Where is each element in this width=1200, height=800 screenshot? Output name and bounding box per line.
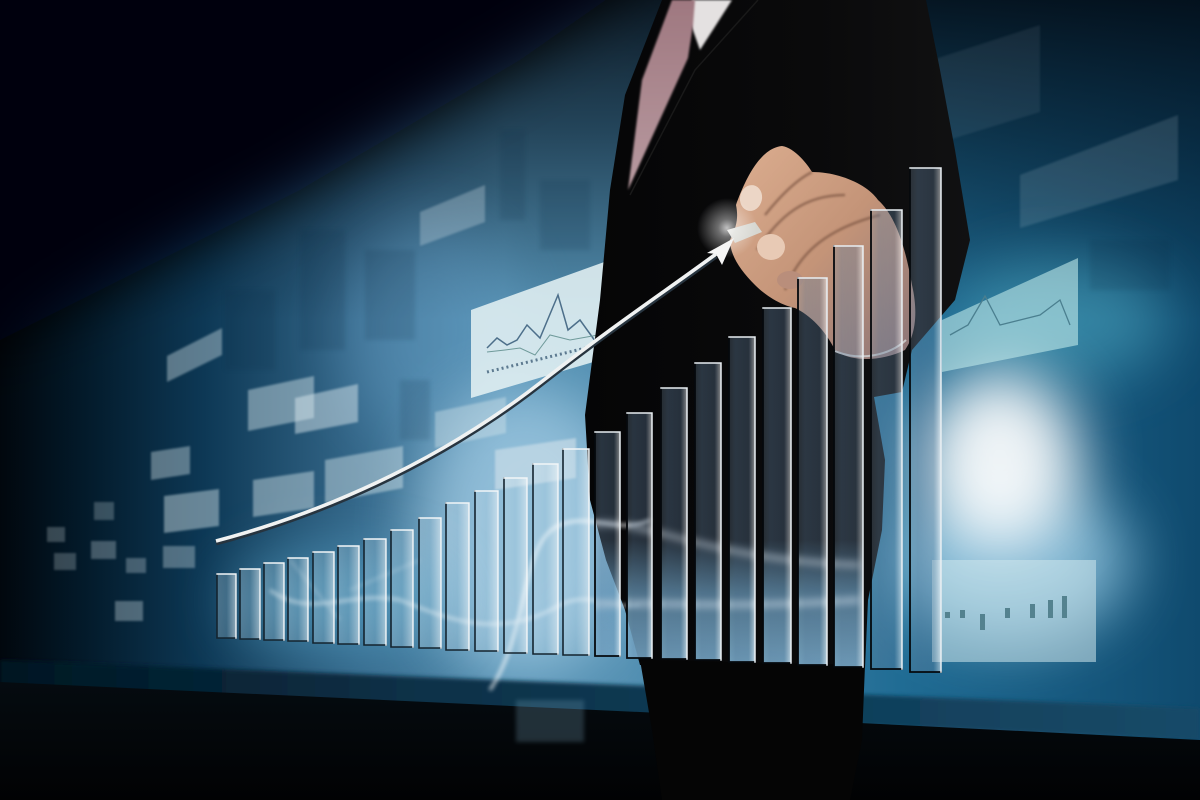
tie [628,0,695,190]
bar 5 [313,552,334,643]
chart panel: centre line chart [471,261,607,398]
index nail [757,234,785,260]
bar 6 [338,546,359,644]
bar 22 [834,246,863,667]
hand base [730,146,915,359]
background: dim data columns [225,130,1170,440]
thumb nail [738,183,764,213]
bar 1 [217,574,236,638]
lapel [630,0,758,195]
bar 12 [504,478,527,653]
bar 20 [763,308,791,663]
cuff [835,340,906,356]
pen glow [697,198,757,258]
light streaks behind bars [270,520,650,690]
growth arrow [216,238,734,543]
bar 23 [871,210,902,669]
hand holding pen [727,146,915,359]
middle finger tip [777,271,803,289]
bar chart: rising glass bars [217,168,941,672]
bar 7 [364,539,386,645]
chart panel: bottom right bar chart [932,560,1096,662]
bar 15 [595,432,620,656]
background: translucent data panels [47,25,1178,621]
bar 10 [446,503,469,650]
floor [0,682,1200,800]
bar 3 [264,563,284,640]
shirt collar [690,0,732,50]
bar 9 [419,518,441,648]
bar 16 [627,413,652,658]
chart panel: right line chart [942,258,1078,372]
bar 11 [475,491,498,651]
suit jacket [585,0,970,668]
bar 24 [910,168,941,672]
bar 21 [798,278,827,665]
bar 19 [729,337,755,662]
bar 8 [391,530,413,647]
light streaks across bars on suit [590,524,870,670]
bar 18 [695,363,721,660]
bar 17 [661,388,687,659]
bar 14 [563,449,589,655]
trousers [640,660,865,800]
floor band [0,660,1200,740]
pen tip [727,222,762,243]
figure: businessman [585,0,970,800]
floor reflection panel [516,700,584,742]
bar 13 [533,464,558,654]
knuckle shadows [757,172,880,290]
arrowhead [707,238,734,265]
bar 4 [288,558,308,641]
bar 2 [240,569,260,639]
